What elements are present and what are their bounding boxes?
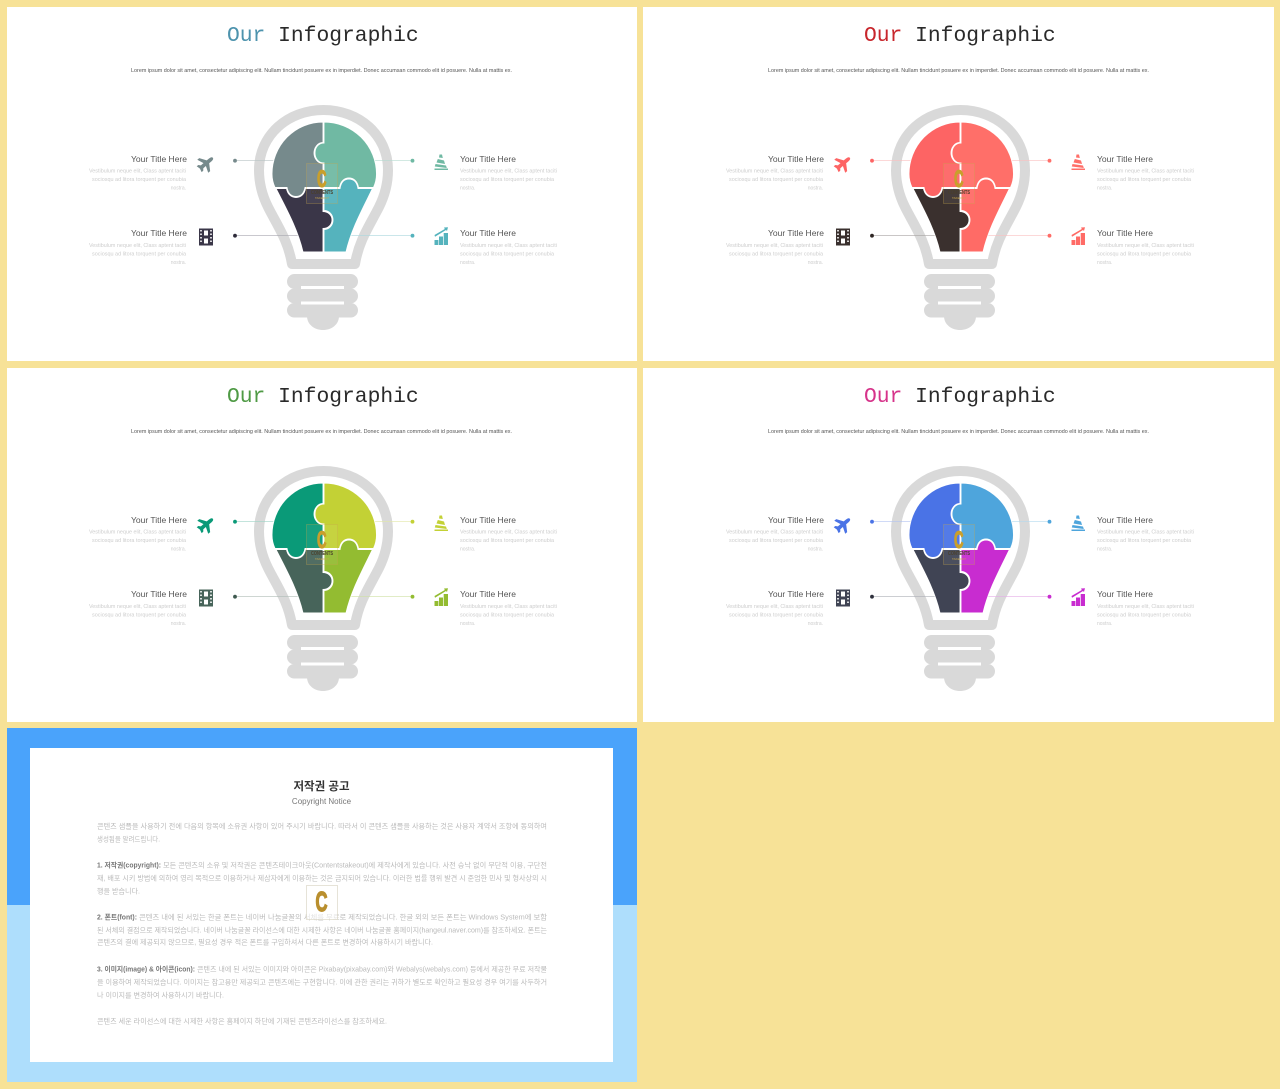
icon: plane <box>831 512 855 537</box>
text block: bottom right: Your Title Here <box>460 589 516 599</box>
text block: top left: sociosqu ad litora torquent per conubia <box>729 538 823 544</box>
text block: bottom right <box>1097 589 1194 627</box>
text block: bottom right: Vestibulum neque elit, Class aptent taciti <box>1097 604 1194 610</box>
watermark: C <box>316 886 328 917</box>
text block: top right: Vestibulum neque elit, Class aptent taciti <box>1097 168 1194 174</box>
paragraph: images and icons: 을 이용하여 제작되었습니다. 이미지는 참고용만 제공되고 콘텐츠에는 구현합니다. 이에 관한 권리는 귀하가 별도로 확인하고 필요성 경우 여기를 사두하거 <box>97 978 547 986</box>
icon: cone <box>1072 154 1085 170</box>
paragraph: intro <box>97 822 547 844</box>
icon: chart <box>434 227 448 245</box>
panel: green infographic <box>7 368 637 722</box>
text block: top left: nostra. <box>808 546 823 552</box>
text block: bottom left: nostra. <box>808 621 823 627</box>
text block: top left: sociosqu ad litora torquent per conubia <box>729 177 823 183</box>
paragraph: images and icons: 나 이미지를 변경하여 사용하시기 바랍니다. <box>97 990 224 1000</box>
text block: top right <box>460 154 557 192</box>
icon: cone <box>434 154 448 170</box>
text block: top left: Your Title Here <box>131 154 187 164</box>
icon: plane <box>831 151 855 176</box>
text block: bottom right: sociosqu ad litora torquent per conubia <box>1097 252 1191 258</box>
panel: copyright notice <box>7 728 637 1082</box>
icon: chart <box>1072 588 1085 606</box>
paragraph: font: 된 서체의 결점으로 제작되었습니다. 네이버 나눔글꼴 라이선스에 대한 시제한 사항은 네이버 나눔글꼴 홈페이지(hangeul.naver.com)를 참조하세요. 폰트는 <box>97 926 548 934</box>
lightbulb outline <box>259 471 388 691</box>
connector lines <box>233 520 414 599</box>
icon: film <box>199 228 213 246</box>
watermark <box>306 524 338 564</box>
connector lines <box>233 159 414 238</box>
intro text: Lorem ipsum dolor sit amet, consectetur adipiscing elit. Nullam tincidunt posuere ex in imperdiet. Donec accumsan commodo elit id posuere. Nulla at mattis ex. <box>768 429 1149 435</box>
text block: top right: nostra. <box>1097 186 1112 192</box>
paragraph: font: 2. 폰트(font): <box>97 914 137 922</box>
text block: bottom left <box>726 228 824 266</box>
text block: top right: sociosqu ad litora torquent per conubia <box>460 538 554 544</box>
text block: top left: Vestibulum neque elit, Class aptent taciti <box>89 168 186 174</box>
puzzle bulb <box>909 483 1014 613</box>
text block: bottom left: Your Title Here <box>131 228 187 238</box>
text block: bottom left: Vestibulum neque elit, Class aptent taciti <box>726 243 823 249</box>
text block: bottom left: nostra. <box>171 621 186 627</box>
text block: top left: Vestibulum neque elit, Class aptent taciti <box>726 168 823 174</box>
text block: top right: nostra. <box>460 546 475 552</box>
text block: top right: sociosqu ad litora torquent per conubia <box>1097 177 1191 183</box>
icon: plane <box>194 512 218 537</box>
text block: top left: sociosqu ad litora torquent per conubia <box>92 177 186 183</box>
text block: bottom right: sociosqu ad litora torquent per conubia <box>460 612 554 618</box>
text block: top right: Your Title Here <box>1097 515 1153 525</box>
text block: bottom left: sociosqu ad litora torquent per conubia <box>729 252 823 258</box>
text block: bottom right: Vestibulum neque elit, Class aptent taciti <box>1097 243 1194 249</box>
heading: Our Infographic <box>864 385 1056 409</box>
watermark <box>944 164 974 204</box>
text block: top left: Your Title Here <box>768 515 824 525</box>
lightbulb outline <box>259 110 388 330</box>
text block: bottom left: sociosqu ad litora torquent per conubia <box>92 612 186 618</box>
text block: top left <box>89 154 187 192</box>
text block: bottom right: Vestibulum neque elit, Class aptent taciti <box>460 604 557 610</box>
text block: top right: Vestibulum neque elit, Class aptent taciti <box>460 168 557 174</box>
paragraph: copyright: 1. 저작권(copyright): <box>97 860 161 870</box>
text block: top right: Your Title Here <box>460 154 516 164</box>
text block: bottom right <box>1097 228 1194 266</box>
paragraph: license: 콘텐츠 세운 라이선스에 대한 시제한 사항은 홈페이지 하단에 기재된 콘텐츠라이선스를 참조하세요. <box>97 1016 387 1026</box>
text block: top right: nostra. <box>1097 546 1112 552</box>
text block: bottom right: nostra. <box>460 621 475 627</box>
panel: blue-magenta infographic <box>643 368 1274 722</box>
text block: bottom right: Vestibulum neque elit, Class aptent taciti <box>460 243 557 249</box>
lightbulb outline <box>896 110 1025 330</box>
heading: Our Infographic <box>227 385 419 409</box>
paragraph: font: 콘텐츠 내에 된 서있는 한글 폰트는 네이버 나눔글꼴의 서체를 무료로 제작되었습니다. 한글 외의 보든 폰트는 Windows System에 보함 <box>139 912 548 922</box>
panel: red infographic <box>643 7 1274 361</box>
text block: bottom right <box>460 228 557 266</box>
text block: top right <box>1097 515 1194 552</box>
text block: bottom left <box>89 228 187 266</box>
paragraph: font: 콘텐츠의 결에 제공되지 않으므로, 필요성 경우 적은 폰트를 구입하셔서 다른 폰트로 변경하여 사용하시기 바랍니다. <box>97 938 433 946</box>
text block: top right: Your Title Here <box>1097 154 1153 164</box>
text block: top right: sociosqu ad litora torquent per conubia <box>460 177 554 183</box>
paragraph: copyright: 모든 콘텐츠의 소유 및 저작권은 콘텐츠테이크아웃(Contentstakeout)에 제작사에게 있습니다. 사전 승낙 없이 무단적 이용, 구단전 <box>163 860 547 870</box>
watermark <box>944 524 974 564</box>
intro text: Lorem ipsum dolor sit amet, consectetur adipiscing elit. Nullam tincidunt posuere ex in imperdiet. Donec accumsan commodo elit id posuere. Nulla at mattis ex. <box>768 68 1149 74</box>
icon: film <box>199 590 213 606</box>
notice subheading: Copyright Notice <box>292 797 352 806</box>
paragraph: font <box>97 912 548 946</box>
text block: top left: Your Title Here <box>131 515 187 525</box>
text block: bottom left: nostra. <box>808 260 823 266</box>
text block: bottom left: sociosqu ad litora torquent per conubia <box>729 612 823 618</box>
paragraph: intro: 생성됨을 알려드립니다. <box>97 834 160 844</box>
icon: plane <box>194 151 218 176</box>
text block: bottom left: Your Title Here <box>768 228 824 238</box>
watermark <box>306 164 338 204</box>
text block: top left: Your Title Here <box>768 154 824 164</box>
text block: top right: sociosqu ad litora torquent per conubia <box>1097 538 1191 544</box>
connector lines <box>870 159 1051 238</box>
text block: bottom left <box>89 589 187 627</box>
paragraph: copyright: 재, 배포 시키 방법에 의하여 영리 목적으로 이용하거나 제삼자에게 이용하는 것은 금지되어 있습니다. 이러한 법률 행위 발견 시 준엄한 민사 및 형사상의 시 <box>97 874 547 882</box>
text block: top right <box>1097 154 1194 192</box>
heading: Our Infographic <box>864 24 1056 48</box>
text block: top right: nostra. <box>460 186 475 192</box>
text block: bottom left: Vestibulum neque elit, Class aptent taciti <box>726 604 823 610</box>
text block: top left: nostra. <box>171 546 186 552</box>
text block: bottom left <box>726 589 824 627</box>
text block: bottom left: Vestibulum neque elit, Class aptent taciti <box>89 604 186 610</box>
connector lines <box>870 520 1051 599</box>
text block: top right: Vestibulum neque elit, Class aptent taciti <box>1097 530 1194 536</box>
icon: cone <box>1072 516 1085 531</box>
paragraph: copyright: 행을 받습니다. <box>97 886 140 896</box>
text block: bottom right: Your Title Here <box>1097 228 1153 238</box>
icon: film <box>836 590 850 606</box>
text block: bottom left: sociosqu ad litora torquent per conubia <box>92 252 186 258</box>
text block: top left <box>726 515 824 552</box>
text block: top right <box>460 515 557 552</box>
icon: chart <box>434 588 448 606</box>
text block: top left <box>89 515 187 552</box>
heading: Our Infographic <box>227 24 419 48</box>
text block: top left: Vestibulum neque elit, Class aptent taciti <box>726 530 823 536</box>
text block: bottom right: Your Title Here <box>1097 589 1153 599</box>
text block: top left <box>726 154 824 192</box>
panel: blue-teal infographic <box>7 7 637 361</box>
text block: bottom left: Your Title Here <box>768 589 824 599</box>
text block: top left: nostra. <box>808 186 823 192</box>
text block: bottom right: sociosqu ad litora torquent per conubia <box>460 252 554 258</box>
watermark <box>306 886 338 920</box>
paragraph: intro: 콘텐츠 샘플을 사용하기 전에 다음의 항목에 소유권 사항이 있어 주시기 바랍니다. 따라서 이 콘텐츠 샘플을 사용하는 것은 사용자 계약서 조항에 동의하여 <box>97 822 547 830</box>
paragraph: images and icons: 3. 이미지(image) & 아이콘(icon): <box>97 964 195 974</box>
text block: top left: nostra. <box>171 186 186 192</box>
text block: bottom right: nostra. <box>460 260 475 266</box>
text block: bottom right: nostra. <box>1097 621 1112 627</box>
icon: chart <box>1072 227 1085 245</box>
lightbulb outline <box>896 471 1025 691</box>
text block: bottom left: Your Title Here <box>131 589 187 599</box>
text block: top left: Vestibulum neque elit, Class aptent taciti <box>89 530 186 536</box>
icon: cone <box>434 516 448 531</box>
paragraph: images and icons: 콘텐츠 내에 된 서있는 이미지와 아이콘은 Pixabay(pixabay.com)와 Webalys(webalys.com) 등에서 제공한 무료 저작물 <box>197 964 548 974</box>
puzzle bulb <box>909 122 1014 252</box>
icon: film <box>836 228 850 246</box>
text block: bottom right <box>460 589 557 627</box>
puzzle bulb <box>272 483 376 613</box>
paragraph: copyright <box>97 860 547 896</box>
intro text: Lorem ipsum dolor sit amet, consectetur adipiscing elit. Nullam tincidunt posuere ex in imperdiet. Donec accumsan commodo elit id posuere. Nulla at mattis ex. <box>131 429 512 435</box>
text block: bottom right: Your Title Here <box>460 228 516 238</box>
notice heading: 저작권 공고 <box>293 779 350 793</box>
text block: bottom right: nostra. <box>1097 260 1112 266</box>
puzzle bulb <box>272 122 376 252</box>
intro text: Lorem ipsum dolor sit amet, consectetur adipiscing elit. Nullam tincidunt posuere ex in imperdiet. Donec accumsan commodo elit id posuere. Nulla at mattis ex. <box>131 68 512 74</box>
text block: top left: sociosqu ad litora torquent per conubia <box>92 538 186 544</box>
text block: top right: Vestibulum neque elit, Class aptent taciti <box>460 530 557 536</box>
text block: top right: Your Title Here <box>460 515 516 525</box>
text block: bottom right: sociosqu ad litora torquent per conubia <box>1097 612 1191 618</box>
text block: bottom left: nostra. <box>171 260 186 266</box>
text block: bottom left: Vestibulum neque elit, Class aptent taciti <box>89 243 186 249</box>
paragraph: images and icons <box>97 964 548 1000</box>
